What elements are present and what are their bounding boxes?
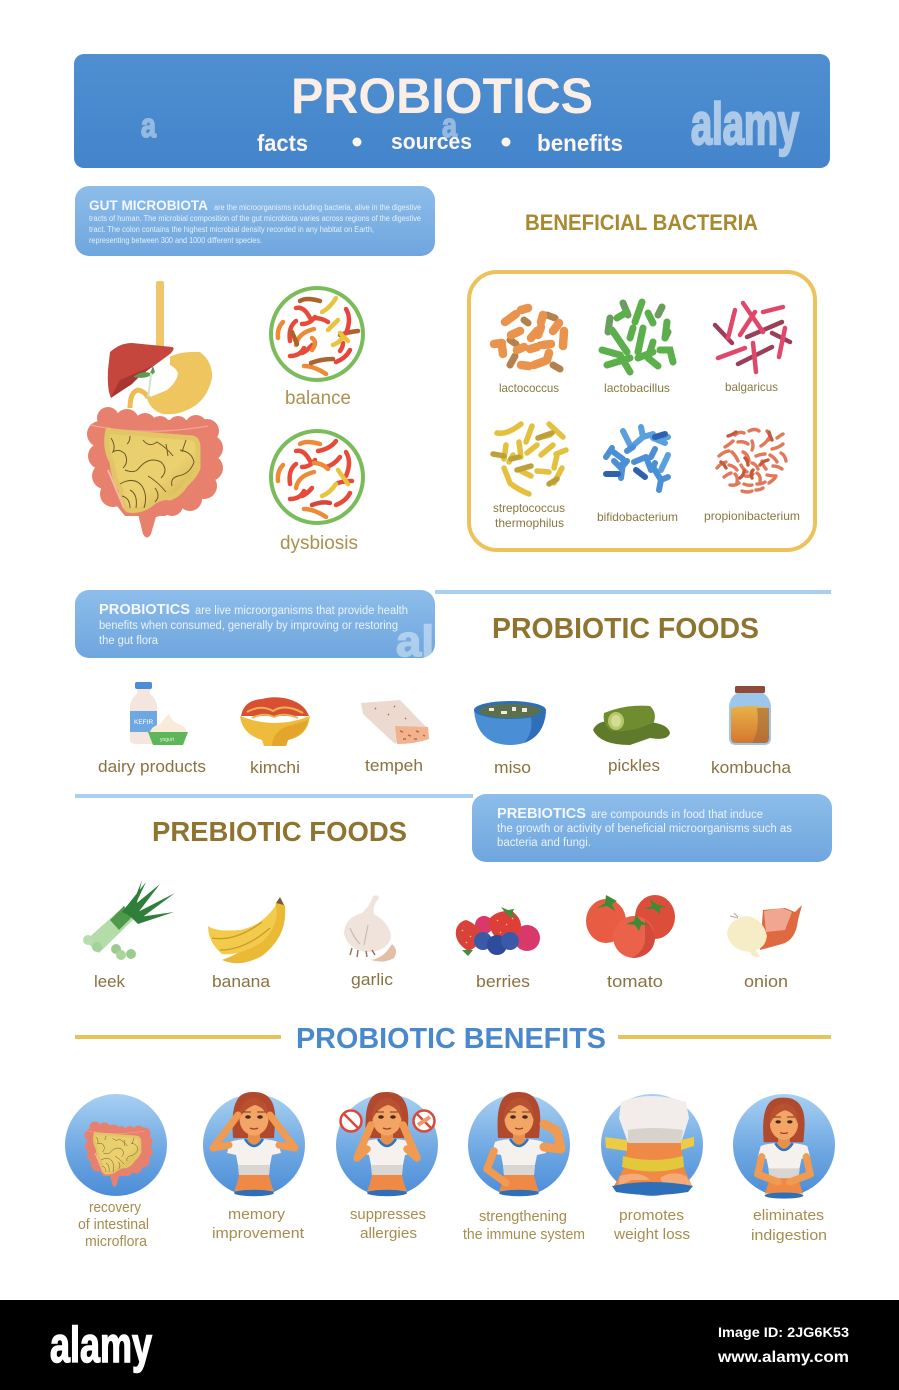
watermark: al [396, 617, 434, 666]
bacteria: balgaricus [715, 303, 790, 372]
label: balance: balance [285, 388, 351, 409]
label: dysbiosis: dysbiosis [280, 533, 358, 554]
label: recovery of intestinal microflora: microflora [85, 1233, 148, 1250]
label: tomato: tomato [607, 972, 663, 991]
panel text: representing between 300 and 1000 different species. [89, 236, 262, 245]
panel heading: PREBIOTICS [497, 806, 586, 822]
label: suppresses allergies: allergies [360, 1225, 417, 1242]
subtitle: facts: facts [257, 130, 308, 156]
label: berries: berries [476, 972, 530, 991]
label: memory improvement: improvement [212, 1225, 305, 1242]
food: pickles [593, 706, 670, 745]
label: memory improvement [212, 1206, 305, 1242]
label: strengthening the immune system [463, 1208, 585, 1243]
food: miso [474, 701, 546, 745]
panel text: are the microorganisms including bacteria, alive in the digestive [214, 203, 421, 212]
gallbladder [133, 363, 155, 378]
label: eliminates indigestion [751, 1207, 827, 1244]
benefit: strengthening the immune system [468, 1092, 570, 1196]
label: banana: banana [212, 972, 271, 991]
subtitle: sources: sources [391, 129, 472, 154]
food: berries [456, 907, 540, 956]
benefit: promotes weight loss [601, 1094, 703, 1196]
subtitle bullet [352, 138, 362, 146]
heading: beneficial bacteria: BENEFICIAL BACTERIA [525, 210, 758, 235]
stomach [147, 352, 212, 414]
food: kimchi [240, 697, 310, 746]
food: dairy products [130, 682, 188, 745]
panel text: tracts of human. The microbial composition of the gut microbiota varies across regions of the digestive [89, 214, 421, 223]
label: onion: onion [744, 972, 788, 991]
subtitle: benefits: benefits [537, 130, 623, 156]
panel: beneficial bacteria [469, 272, 815, 550]
label: eliminates indigestion: indigestion [751, 1227, 827, 1244]
panel text: are live microorganisms that provide health [195, 605, 408, 617]
food: dairy products: yogurt [160, 737, 175, 743]
digestive system illustration [87, 281, 223, 538]
food: tempeh [361, 700, 429, 744]
heading: probiotic benefits [75, 1023, 831, 1055]
food: banana [208, 897, 285, 963]
panel text [99, 605, 408, 647]
label: strengthening the immune system: strengthening [479, 1208, 567, 1225]
footer logo: alamy [50, 1317, 152, 1373]
header banner [74, 54, 830, 168]
heading: probiotic foods: PROBIOTIC FOODS [492, 613, 759, 645]
label: tempeh: tempeh [365, 756, 423, 775]
label: lactobacillus: lactobacillus [604, 381, 670, 395]
label: propionibacterium: propionibacterium [704, 509, 800, 523]
panel text [89, 203, 421, 245]
label: balgaricus: balgaricus [725, 380, 778, 394]
label: lactococcus: lactococcus [499, 381, 559, 395]
esophagus [156, 281, 164, 349]
label: kombucha: kombucha [711, 758, 792, 777]
benefit: recovery of intestinal microflora [65, 1094, 167, 1196]
heading: probiotic benefits: PROBIOTIC BENEFITS [296, 1023, 606, 1055]
label: promotes weight loss: weight loss [613, 1226, 690, 1243]
label: suppresses allergies [350, 1206, 426, 1242]
panel text [497, 809, 792, 849]
benefit: eliminates indigestion [733, 1094, 835, 1199]
intestines [87, 407, 223, 538]
icon: no allergens left [340, 1110, 362, 1132]
label: memory improvement: memory [228, 1206, 286, 1223]
label: thermophilus: thermophilus [495, 516, 564, 530]
liver [108, 343, 174, 398]
label: recovery of intestinal microflora: of intestinal [78, 1216, 149, 1233]
label: leek: leek [94, 972, 125, 991]
footer bar [0, 1300, 899, 1390]
panel text: bacteria and fungi. [497, 837, 591, 849]
label: recovery of intestinal microflora [78, 1199, 149, 1250]
label: streptococcus: streptococcus [493, 501, 565, 515]
balance circle [271, 288, 363, 380]
label: garlic: garlic [351, 970, 394, 989]
bacteria: lactobacillus [602, 302, 673, 372]
food: onion [727, 905, 802, 957]
image id: Image ID: 2JG6K53 [718, 1324, 849, 1340]
panel text: the growth or activity of beneficial microorganisms such as [497, 823, 792, 835]
panel: gut microbiota [75, 186, 435, 256]
benefit: memory improvement [203, 1092, 305, 1196]
food: kombucha [729, 686, 771, 745]
heading: prebiotic foods: PREBIOTIC FOODS [152, 816, 407, 847]
panel text: are compounds in food that induce [591, 809, 763, 821]
label: recovery of intestinal microflora: recovery [89, 1199, 141, 1216]
bacteria: propionibacterium [717, 430, 786, 492]
panel heading: GUT MICROBIOTA [89, 198, 208, 213]
bacteria: lactococcus [494, 308, 564, 369]
label: bifidobacterium: bifidobacterium [597, 510, 678, 524]
label: miso: miso [494, 758, 531, 777]
label: pickles: pickles [608, 756, 660, 775]
panel text: benefits when consumed, generally by improving or restoring [99, 620, 398, 632]
label: kimchi: kimchi [250, 758, 300, 777]
website: www.alamy.com [717, 1349, 849, 1366]
label: eliminates indigestion: eliminates [753, 1207, 824, 1224]
panel text: tract. The colon contains the highest microbial density recorded in any habitat on Earth, [89, 225, 374, 234]
label: promotes weight loss [613, 1207, 690, 1243]
panel: prebiotics [75, 794, 832, 862]
watermark letter: a [442, 107, 458, 145]
watermark letter: a [141, 107, 157, 145]
label: promotes weight loss: promotes [619, 1207, 684, 1224]
food: garlic [344, 895, 396, 962]
title: PROBIOTICS [291, 68, 593, 124]
dysbiosis circle [271, 431, 363, 523]
icon: no allergens right [414, 1110, 434, 1132]
label: suppresses allergies: suppresses [350, 1206, 426, 1223]
subtitle bullet [502, 138, 510, 146]
label: strengthening the immune system: the immune system [463, 1226, 585, 1243]
bacteria: streptococcus thermophilus [493, 424, 566, 494]
label: dairy products: dairy products [98, 757, 206, 776]
food: tomato [586, 895, 675, 958]
food: leek [83, 880, 175, 960]
panel: probiotics [75, 590, 831, 666]
panel text: the gut flora [99, 635, 159, 647]
benefit: suppresses allergies [336, 1092, 438, 1196]
watermark: alamy [691, 92, 799, 157]
panel heading: PROBIOTICS [99, 602, 190, 618]
bacteria: bifidobacterium [606, 427, 668, 490]
food: dairy products: KEFIR [134, 719, 153, 726]
